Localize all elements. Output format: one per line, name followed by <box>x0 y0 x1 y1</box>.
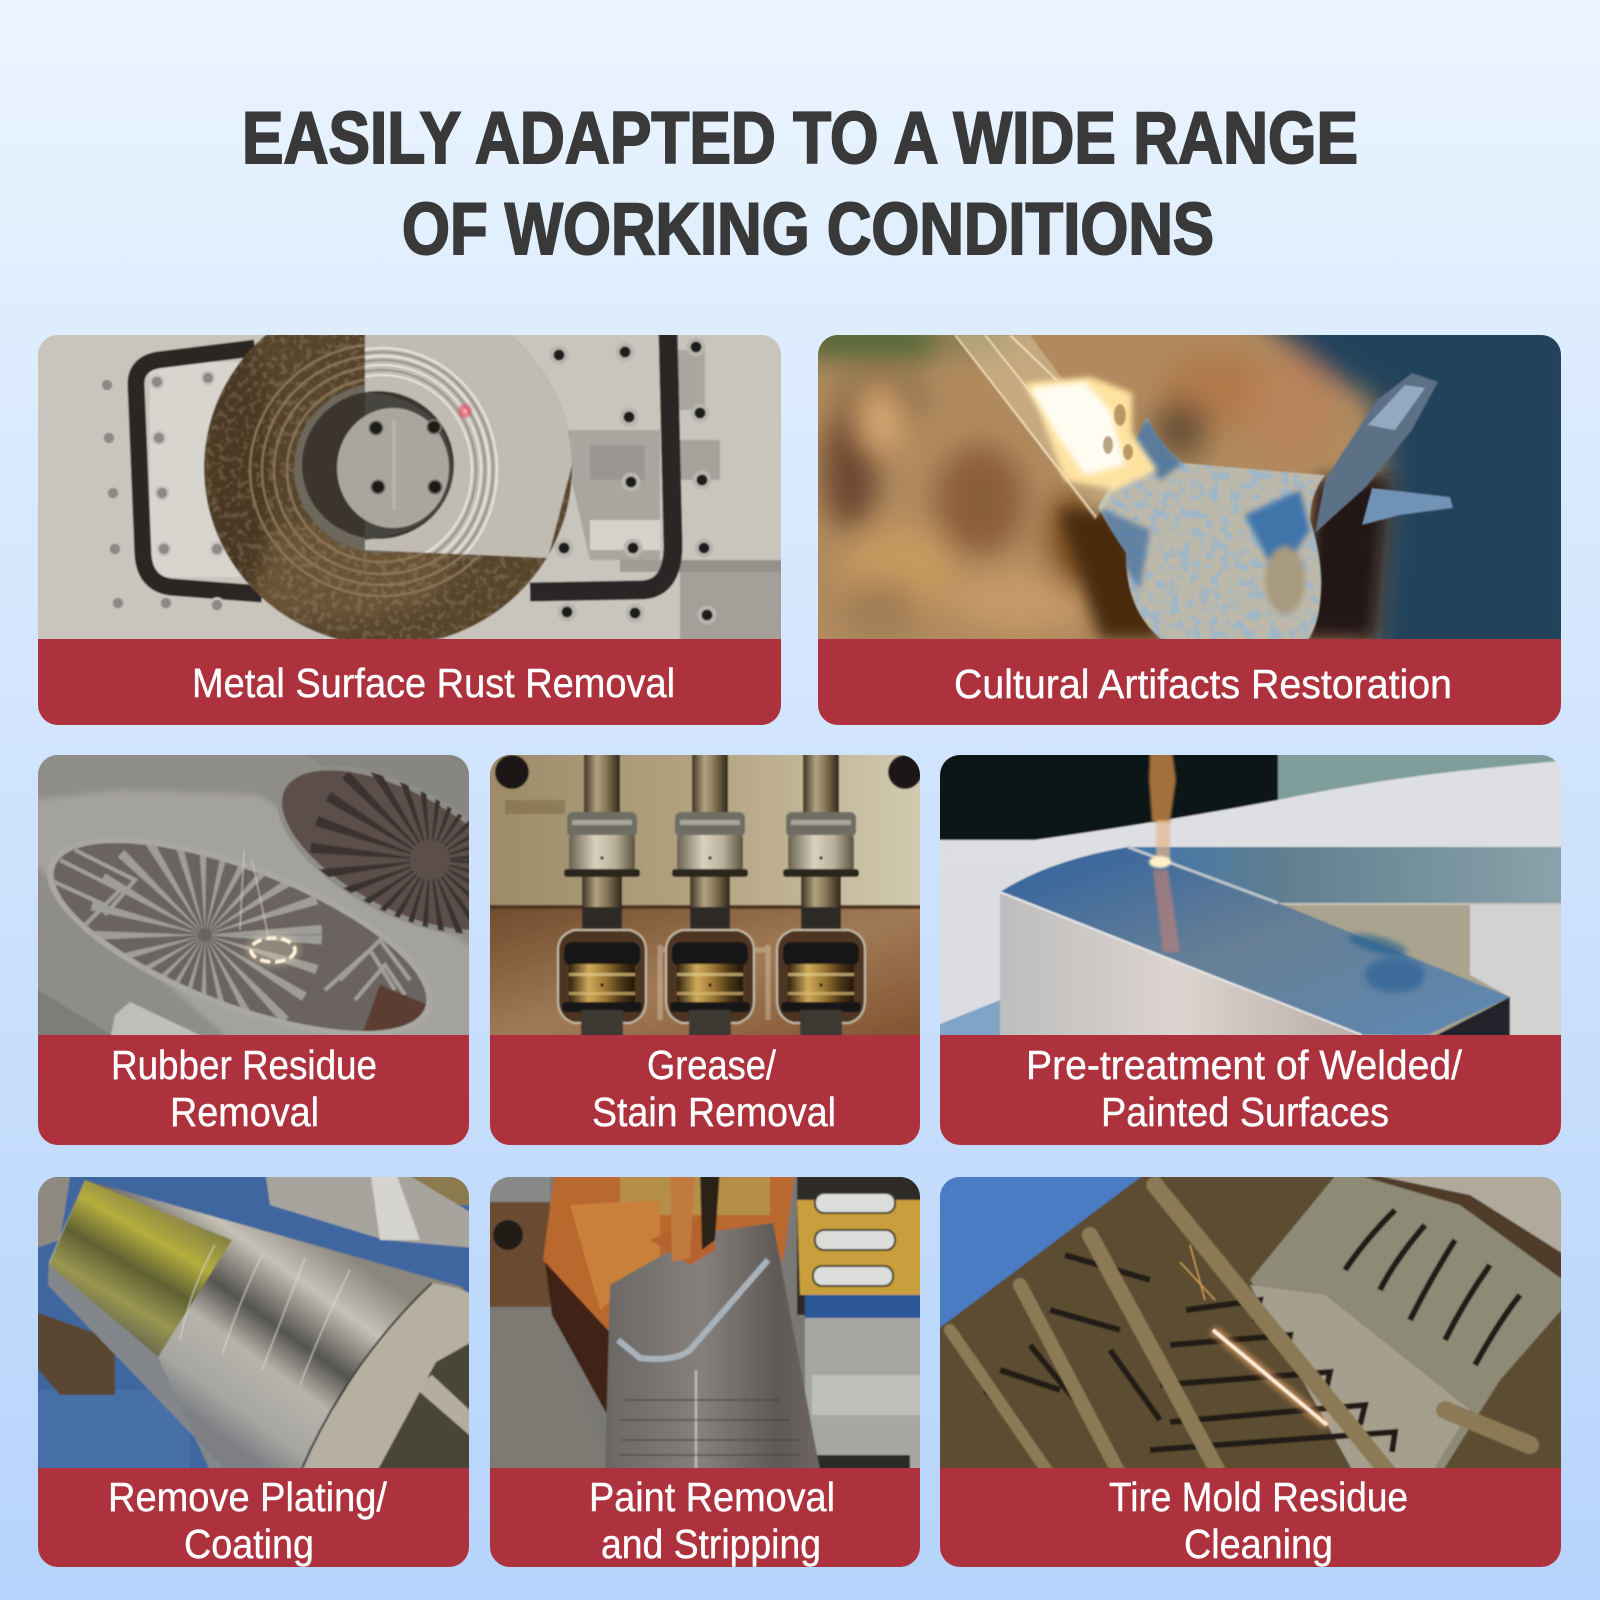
caption: cultural artifacts restoration <box>818 639 1561 725</box>
panel: remove plating and coating <box>30 1170 475 1567</box>
caption: grease and stain removal: Grease/ <box>647 1042 777 1088</box>
caption: tire mold residue cleaning: Tire Mold Residue <box>1109 1474 1408 1520</box>
photo: steel column with stripped paint <box>480 1170 930 1475</box>
panel: cultural artifacts restoration <box>818 335 1561 725</box>
panel: grease and stain removal <box>480 750 930 1145</box>
caption: paint removal and stripping: Paint Removal <box>589 1474 835 1520</box>
panel: paint removal and stripping <box>480 1170 930 1567</box>
caption: rubber residue removal: Removal <box>170 1089 319 1135</box>
caption: rubber residue removal <box>38 1035 469 1145</box>
caption: metal surface rust removal: Metal Surface Rust Removal <box>192 660 675 706</box>
caption: cultural artifacts restoration: Cultural Artifacts Restoration <box>954 661 1452 707</box>
title: OF WORKING CONDITIONS <box>402 189 1214 270</box>
caption: pre-treatment of welded and painted surfaces: Painted Surfaces <box>1101 1089 1389 1135</box>
caption: tire mold residue cleaning <box>940 1468 1561 1567</box>
panel: metal surface rust removal <box>38 335 781 725</box>
panel: tire mold residue cleaning <box>930 1170 1570 1567</box>
caption: grease and stain removal <box>490 1035 920 1145</box>
photo: cylinder with stripped plating <box>30 1170 475 1475</box>
photo: rusted disc half cleaned <box>38 335 781 639</box>
caption: tire mold residue cleaning: Cleaning <box>1184 1521 1333 1567</box>
caption: remove plating and coating: Remove Plating/ <box>108 1474 388 1520</box>
photo: metal tube weld with laser <box>930 750 1570 1040</box>
caption: remove plating and coating: Coating <box>184 1521 314 1567</box>
title: EASILY ADAPTED TO A WIDE RANGE <box>242 98 1358 179</box>
caption: rubber residue removal: Rubber Residue <box>111 1042 377 1088</box>
photo: shoe sole mould <box>38 755 469 1035</box>
title <box>242 98 1358 270</box>
caption: remove plating and coating <box>38 1468 469 1567</box>
caption: pre-treatment of welded and painted surfaces <box>940 1035 1561 1145</box>
photo: mould with three rods <box>480 750 930 1042</box>
caption: grease and stain removal: Stain Removal <box>592 1089 836 1135</box>
panel: rubber residue removal <box>38 755 469 1145</box>
caption: paint removal and stripping: and Stripping <box>601 1521 821 1567</box>
panel: pre-treatment of welded and painted surfaces <box>930 750 1570 1145</box>
photo: tire mould with laser streak <box>930 1170 1570 1475</box>
caption: paint removal and stripping <box>490 1468 920 1567</box>
photo: laser on rusted bird sculpture <box>818 335 1561 639</box>
caption: metal surface rust removal <box>38 639 781 725</box>
caption: pre-treatment of welded and painted surfaces: Pre-treatment of Welded/ <box>1026 1042 1463 1088</box>
